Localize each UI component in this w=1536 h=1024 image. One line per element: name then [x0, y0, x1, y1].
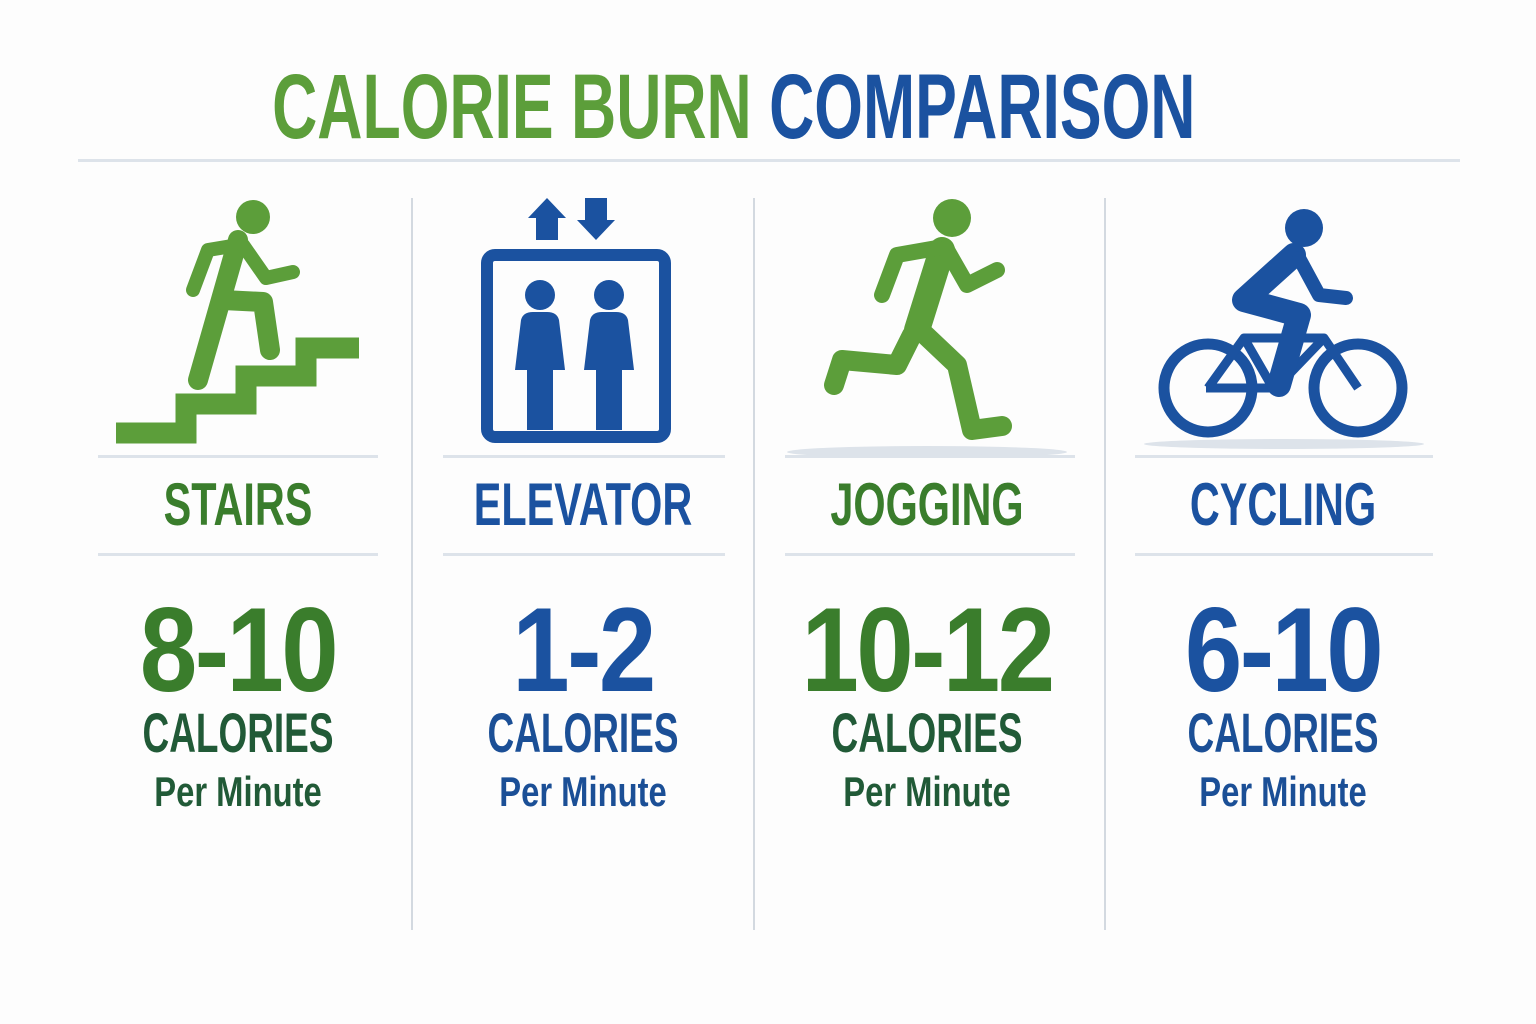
per minute: Per Minute [1199, 768, 1367, 815]
icon: runner [787, 199, 1067, 455]
panel: elevator [474, 198, 692, 815]
unit: CALORIES [488, 701, 678, 764]
value: jogging: 10-12 [801, 583, 1053, 717]
label: cycling: CYCLING [1190, 471, 1376, 538]
unit: CALORIES [832, 701, 1022, 764]
per minute: Per Minute [499, 768, 667, 815]
label: jogging: JOGGING [830, 471, 1024, 538]
value: cycling: 6-10 [1185, 583, 1381, 717]
unit: CALORIES [143, 701, 333, 764]
icon: stairs climber [116, 200, 359, 444]
icon: cyclist [1144, 209, 1424, 449]
title: CALORIE BURN COMPARISON [272, 56, 1195, 158]
unit: CALORIES [1188, 701, 1378, 764]
value: stairs: 8-10 [140, 583, 336, 717]
per minute: Per Minute [843, 768, 1011, 815]
panel: stairs [116, 200, 359, 815]
panel: jogging [787, 199, 1067, 815]
value: elevator: 1-2 [512, 583, 654, 717]
panel: cycling [1144, 209, 1424, 815]
icon: elevator [481, 198, 671, 443]
label: elevator: ELEVATOR [474, 471, 692, 538]
per minute: Per Minute [154, 768, 322, 815]
label: stairs: STAIRS [164, 471, 312, 538]
